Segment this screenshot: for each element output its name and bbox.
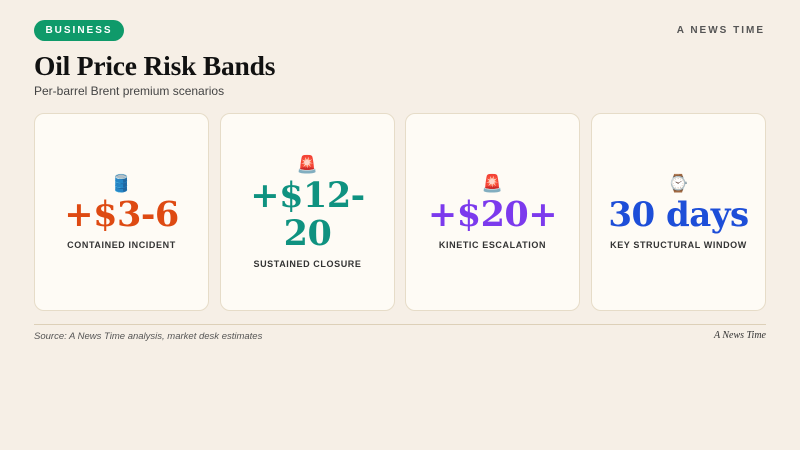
- label: KINETIC ESCALATION: [439, 240, 546, 250]
- value: +$12-: [250, 175, 365, 216]
- brand: A NEWS TIME: [677, 25, 765, 36]
- title: Oil Price Risk Bands: [34, 50, 275, 81]
- label: KEY STRUCTURAL WINDOW: [610, 240, 747, 250]
- tag: business: BUSINESS: [45, 25, 113, 36]
- value: 30 days: [608, 195, 749, 235]
- label: SUSTAINED CLOSURE: [253, 259, 362, 269]
- card: contained incident: [34, 113, 209, 311]
- byline: A News Time: [714, 330, 766, 341]
- icon: siren: 🚨: [482, 174, 503, 193]
- source note: Source: A News Time analysis, market desk estimates: [34, 331, 262, 342]
- tag: business: [34, 20, 124, 41]
- value: 20: [284, 213, 331, 254]
- card: sustained closure: [220, 113, 395, 311]
- card: key window: [591, 113, 766, 311]
- icon: siren: 🚨: [297, 155, 318, 174]
- label: CONTAINED INCIDENT: [67, 240, 176, 250]
- icon: oil barrel: 🛢️: [111, 174, 132, 193]
- value: +$20+: [428, 194, 557, 235]
- card: kinetic escalation: [405, 113, 580, 311]
- value: +$3-6: [64, 194, 179, 235]
- value: [250, 175, 365, 254]
- subtitle: Per-barrel Brent premium scenarios: [34, 84, 224, 98]
- icon: watch: ⌚: [668, 174, 689, 193]
